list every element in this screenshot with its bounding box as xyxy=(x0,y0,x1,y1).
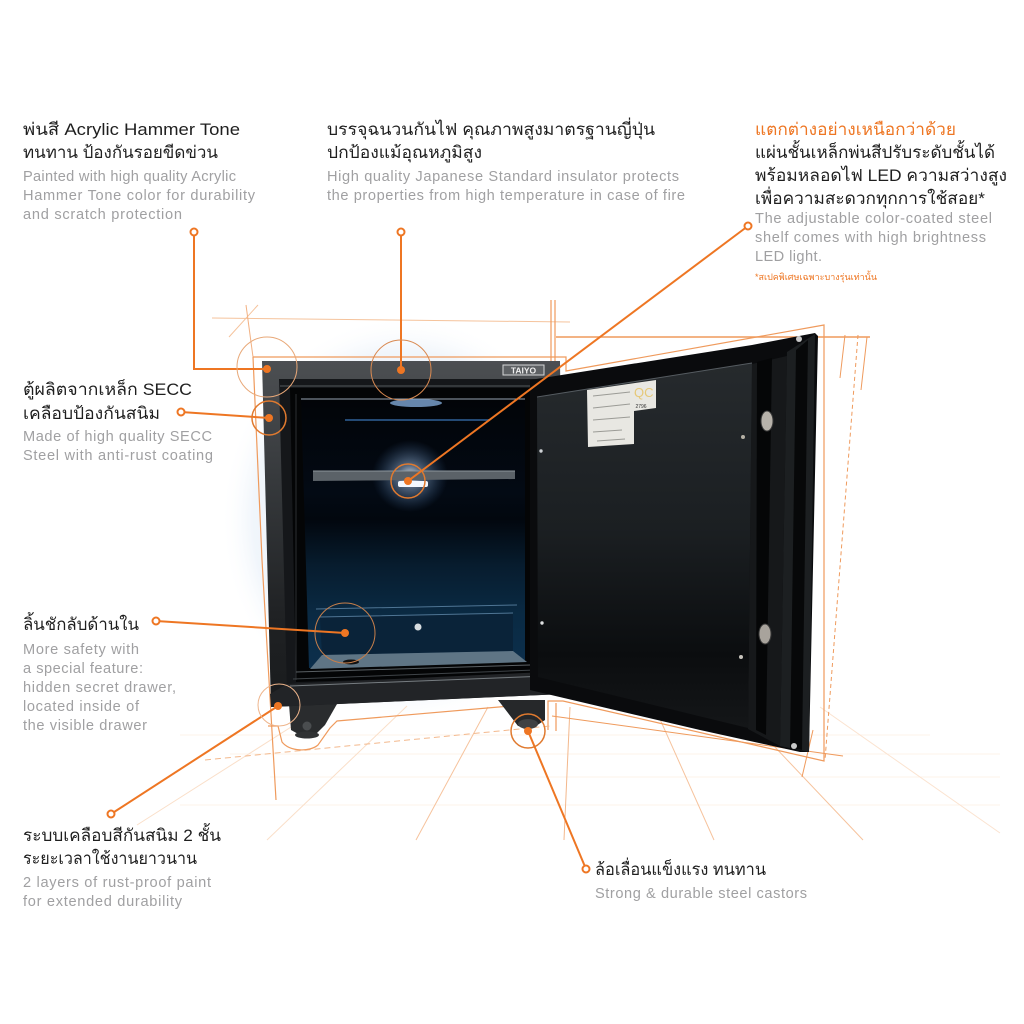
text block: SECC steel: Steel with anti-rust coating xyxy=(23,448,213,464)
hidden secret drawer xyxy=(310,605,527,669)
text block: SECC steel: Made of high quality SECC xyxy=(23,429,212,445)
wireframe outline of safe xyxy=(205,300,870,800)
text block: SECC steel xyxy=(23,378,213,464)
floor perspective lines xyxy=(137,706,1000,840)
text block: SECC steel: เคลือบป้องกันสนิม xyxy=(23,404,160,423)
text block: hammer tone paint: พ่นสี Acrylic Hammer Tone xyxy=(23,120,240,139)
text block: LED shelf: แตกต่างอย่างเหนือกว่าด้วย xyxy=(755,120,956,139)
callout: hammer tone paint xyxy=(190,228,297,397)
text block: rust-proof paint: 2 layers of rust-proof paint xyxy=(23,875,211,891)
text block: fire insulator xyxy=(327,117,685,204)
callout: rust-proof paint xyxy=(108,684,300,818)
text block: LED shelf: พร้อมหลอดไฟ LED ความสว่างสูง xyxy=(755,165,1007,186)
text block: fire insulator: the properties from high temperature in case of fire xyxy=(327,188,685,204)
door certificate label: QC xyxy=(634,385,654,400)
text block: LED shelf: แผ่นชั้นเหล็กพ่นสีปรับระดับชั้นได้ xyxy=(755,140,995,162)
text block: hammer tone paint: Painted with high quality Acrylic xyxy=(23,169,236,185)
safe body frame xyxy=(262,361,564,707)
text block: secret drawer: More safety with xyxy=(23,642,139,658)
text block: castors xyxy=(595,857,807,902)
door certificate label: 2796 xyxy=(635,404,647,410)
callout: castors xyxy=(511,714,590,872)
text block: hammer tone paint: ทนทาน ป้องกันรอยขีดข่วน xyxy=(23,143,218,162)
text block: castors: ล้อเลื่อนแข็งแรง ทนทาน xyxy=(595,857,766,879)
text block: secret drawer: located inside of xyxy=(23,699,140,715)
background glow behind safe xyxy=(220,315,590,725)
text block: LED shelf: เพื่อความสะดวกทุกการใช้สอย* xyxy=(755,186,985,209)
safe logo plate: TAIYO xyxy=(511,366,537,376)
safe logo plate xyxy=(503,365,544,376)
text block: secret drawer: the visible drawer xyxy=(23,718,147,734)
safe left foot xyxy=(289,704,337,738)
safe lower sill xyxy=(270,672,563,707)
safe right foot xyxy=(498,700,545,729)
door bolt holes xyxy=(539,336,802,749)
safe interior cavity xyxy=(301,398,525,668)
text block: castors: Strong & durable steel castors xyxy=(595,886,807,902)
text block: rust-proof paint: ระบบเคลือบสีกันสนิม 2 ชั้น xyxy=(23,823,221,845)
text block: secret drawer: ลิ้นชักลับด้านใน xyxy=(23,612,139,634)
text block: hammer tone paint: Hammer Tone color for durability xyxy=(23,188,256,204)
text block: hammer tone paint xyxy=(23,120,256,223)
text block: LED shelf: LED light. xyxy=(755,249,822,265)
text block: LED shelf: *สเปคพิเศษเฉพาะบางรุ่นเท่านั้น xyxy=(755,270,877,283)
callout: SECC steel xyxy=(178,401,286,435)
internal shelf with LED light xyxy=(313,440,515,512)
door certificate label xyxy=(587,380,656,447)
text block: SECC steel: ตู้ผลิตจากเหล็ก SECC xyxy=(23,378,192,400)
callout: LED shelf xyxy=(391,222,752,498)
safe product illustration xyxy=(262,333,818,752)
text block: hammer tone paint: and scratch protection xyxy=(23,207,182,223)
text block: secret drawer xyxy=(23,612,176,734)
text block: fire insulator: High quality Japanese Standard insulator protects xyxy=(327,169,679,185)
text block: secret drawer: hidden secret drawer, xyxy=(23,680,176,696)
text block: rust-proof paint: for extended durability xyxy=(23,894,183,910)
callout: fire insulator xyxy=(371,228,431,400)
text block: LED shelf: shelf comes with high brightness xyxy=(755,230,986,246)
text block: fire insulator: บรรจุฉนวนกันไฟ คุณภาพสูงมาตรฐานญี่ปุ่น xyxy=(327,117,655,140)
door inner panel xyxy=(537,363,752,728)
text block: rust-proof paint xyxy=(23,823,221,910)
text block: secret drawer: a special feature: xyxy=(23,661,143,677)
text block: LED shelf xyxy=(755,120,1007,283)
text block: fire insulator: ปกป้องแม้อุณหภูมิสูง xyxy=(327,143,482,163)
open door xyxy=(530,333,818,752)
text block: rust-proof paint: ระยะเวลาใช้งานยาวนาน xyxy=(23,848,197,868)
callout: secret drawer xyxy=(152,603,375,663)
text block: LED shelf: The adjustable color-coated steel xyxy=(755,211,992,227)
